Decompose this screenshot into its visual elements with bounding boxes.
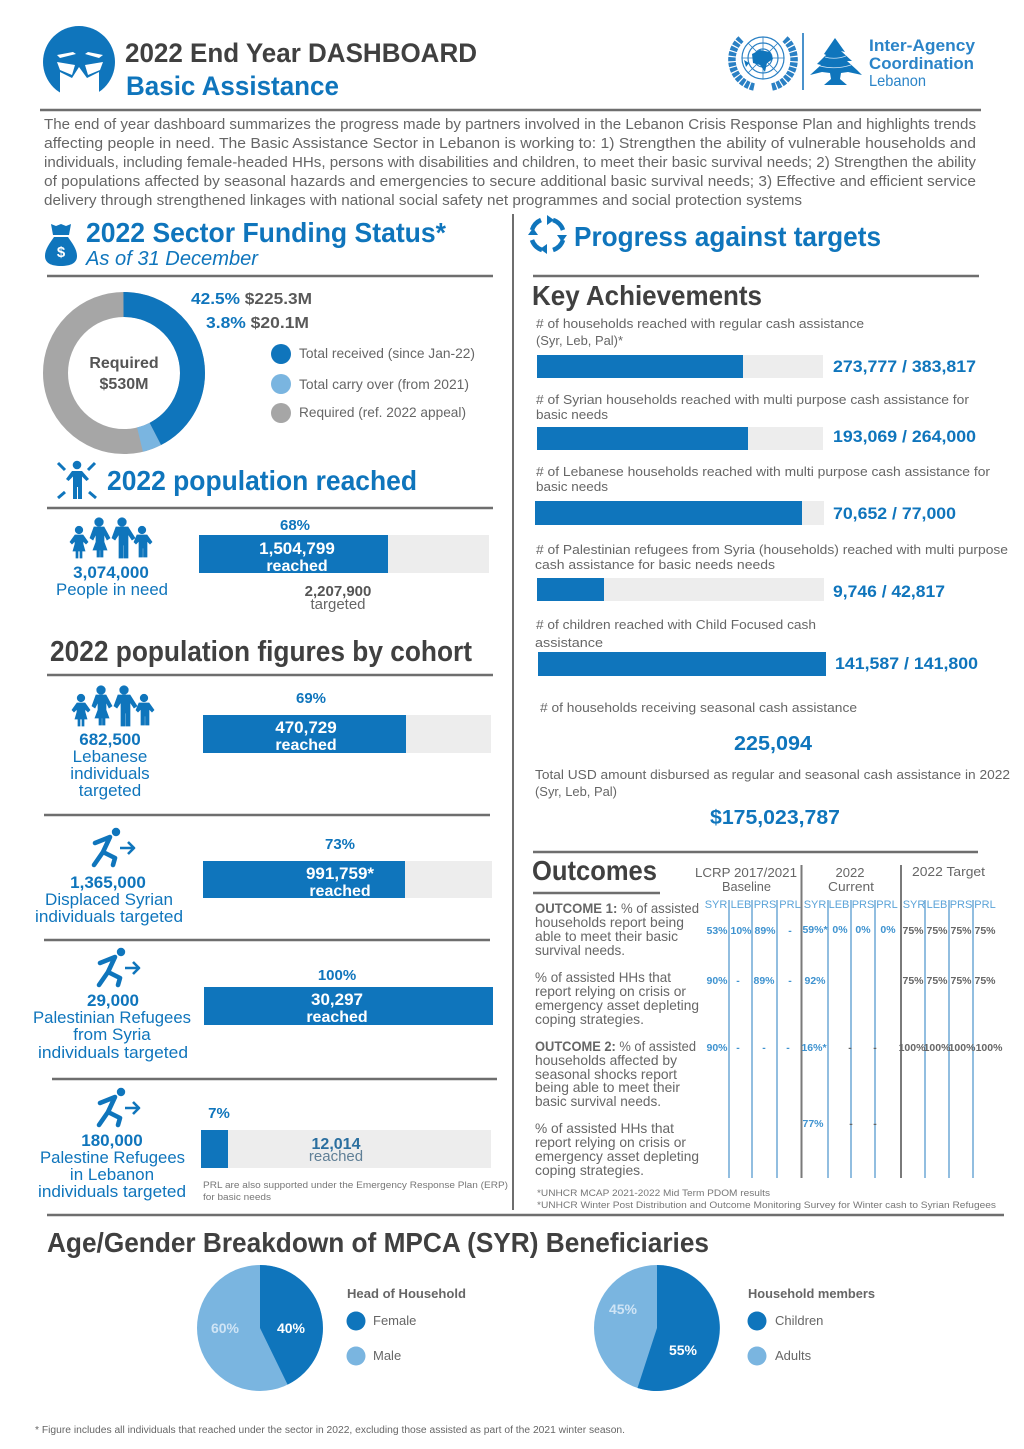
heading: progress: Progress against targets xyxy=(574,221,881,252)
table headers: 2022 Target xyxy=(912,864,985,879)
bar: Syrian xyxy=(203,836,492,900)
heading: key achievements: Key Achievements xyxy=(532,280,762,311)
footnote: * Figure includes all individuals that reached under the sector in 2022, excluding those assisted as part of the 2021 winter season. xyxy=(35,1425,625,1436)
icon: money bag xyxy=(45,224,77,266)
population column labels: PRS xyxy=(852,899,874,911)
bar: population reached: targeted xyxy=(310,596,366,613)
outcome descriptions: able to meet their basic xyxy=(535,928,678,944)
achievement: Syrian MPC: basic needs xyxy=(536,407,609,422)
logo: divider xyxy=(802,33,804,90)
achievement: PRS MPC xyxy=(535,542,1008,601)
intro paragraph: The end of year dashboard summarizes the progress made by partners involved in the Lebanon Crisis Response Plan and highlights trends xyxy=(44,116,976,133)
achievement: child cash: assistance xyxy=(535,635,603,650)
legend: household members: Household members xyxy=(748,1286,875,1301)
outcome descriptions: emergency asset depleting xyxy=(535,997,699,1013)
pie chart: head of household: 60% xyxy=(211,1320,240,1336)
outcome descriptions: % of assisted HHs that xyxy=(535,969,671,985)
achievement: seasonal xyxy=(540,700,857,755)
outcome 2 values: - xyxy=(736,1042,740,1054)
bar: PRS: 100% xyxy=(318,967,356,984)
outcome 2b values: - xyxy=(873,1118,877,1130)
heading: age/gender breakdown: Age/Gender Breakdown of MPCA (SYR) Beneficiaries xyxy=(47,1227,709,1258)
title xyxy=(125,38,477,101)
title: Basic Assistance xyxy=(126,71,339,101)
Lebanese label: Lebanese xyxy=(73,747,147,766)
achievement: Syrian MPC: 193,069 / 264,000 xyxy=(833,427,976,446)
achievement: Lebanese MPC xyxy=(535,464,991,525)
PRL note: for basic needs xyxy=(203,1192,272,1202)
PRL label: Palestine Refugees xyxy=(40,1148,185,1167)
outcome descriptions: report relying on crisis or xyxy=(535,1134,686,1150)
outcome 1 values: 0% xyxy=(855,924,871,936)
outcome descriptions: OUTCOME 2: % of assisted xyxy=(535,1038,696,1054)
bar: PRL: 12,014 xyxy=(312,1136,361,1153)
outcome 1b values: 89% xyxy=(753,975,775,987)
bar: population reached: 2,207,900 xyxy=(305,583,371,600)
pie chart: household members: 45% xyxy=(609,1301,638,1317)
outcome descriptions: coping strategies. xyxy=(535,1162,644,1178)
bar: PRL: 7% xyxy=(208,1105,230,1122)
PRS label: Palestinian Refugees xyxy=(33,1008,191,1027)
funding legend: Required (ref. 2022 appeal) xyxy=(299,404,466,420)
population column labels: PRS xyxy=(754,899,776,911)
achievement: regular cash: # of households reached with regular cash assistance xyxy=(536,316,864,331)
outcome 1 values: 89% xyxy=(754,925,776,937)
logo: Inter-Agency Coordination text: Inter-Agency xyxy=(869,36,976,55)
population column labels: PRS xyxy=(950,899,972,911)
outcome footnotes: *UNHCR MCAP 2021-2022 Mid Term PDOM results xyxy=(537,1188,771,1198)
achievement: seasonal: # of households receiving seasonal cash assistance xyxy=(540,700,857,715)
Syrian label: 1,365,000 xyxy=(70,873,146,892)
bar: PRS: 30,297 xyxy=(311,990,363,1009)
achievement: child cash: 141,587 / 141,800 xyxy=(835,654,978,673)
Syrian label: individuals targeted xyxy=(35,907,183,926)
title: 2022 End Year DASHBOARD xyxy=(125,38,477,68)
intro paragraph xyxy=(44,116,976,209)
outcome descriptions: being able to meet their xyxy=(535,1079,680,1095)
icon: family xyxy=(70,518,152,558)
achievement: Lebanese MPC: basic needs xyxy=(536,479,609,494)
cohort: Lebanese xyxy=(70,686,491,800)
outcome footnotes xyxy=(537,1188,997,1210)
PRL label: 180,000 xyxy=(81,1131,143,1150)
bar: population reached xyxy=(199,517,489,613)
achievement: USD disbursed: Total USD amount disbursed as regular and seasonal cash assistance in 2022 xyxy=(535,767,1010,782)
heading: population reached: 2022 population reached xyxy=(107,465,417,496)
bar: Lebanese: reached xyxy=(275,737,337,754)
bar: PRL xyxy=(201,1105,491,1168)
donut chart: Required xyxy=(89,355,159,372)
intro paragraph: affecting people in need. The Basic Assistance Sector in Lebanon is working to: 1) Strengthen the ability of vulnerable households and xyxy=(44,135,976,152)
intro paragraph: individuals, including female-headed HHs, persons with disabilities and children, to meet their basic survival needs; 2) Strengthen the ability xyxy=(44,154,976,171)
achievement: regular cash xyxy=(536,316,976,378)
outcome 2 values: 90% xyxy=(706,1042,728,1054)
achievement: USD disbursed: (Syr, Leb, Pal) xyxy=(535,784,617,799)
outcome 1 values: 75% xyxy=(950,925,972,937)
outcome descriptions: OUTCOME 1: % of assisted xyxy=(535,900,699,916)
outcome 1b values: 75% xyxy=(950,975,972,987)
donut chart xyxy=(56,304,192,442)
outcomes table lines xyxy=(729,865,973,1178)
population column labels: PRL xyxy=(779,899,801,911)
outcome 1 values: 0% xyxy=(880,924,896,936)
bar: population reached: reached xyxy=(266,558,328,575)
population column labels xyxy=(705,899,996,911)
logo: Inter-Agency Coordination text: Lebanon xyxy=(869,73,926,90)
achievement: child cash: # of children reached with Child Focused cash xyxy=(536,617,816,632)
cohort: Palestinian Refugees from Syria xyxy=(33,948,493,1062)
outcome 1b values: - xyxy=(788,975,792,987)
outcome 1b values xyxy=(706,975,996,987)
PRL label xyxy=(38,1131,186,1201)
population column labels: SYR xyxy=(705,899,727,911)
icon: money bag: $ xyxy=(57,244,66,261)
funding legend: Total carry over (from 2021) xyxy=(299,376,469,392)
achievement: PRS MPC: 9,746 / 42,817 xyxy=(833,582,945,601)
outcome descriptions: emergency asset depleting xyxy=(535,1148,699,1164)
outcome descriptions: % of assisted HHs that xyxy=(535,1120,674,1136)
pie chart: head of household xyxy=(197,1265,323,1391)
outcome 1 values: 75% xyxy=(974,925,996,937)
bar: Syrian: 73% xyxy=(325,836,355,853)
population column labels: LEB xyxy=(829,899,849,911)
cohort: Palestine Refugees in Lebanon xyxy=(38,1088,508,1202)
outcome 2 values: 100% xyxy=(976,1042,1003,1054)
logo: UN emblem xyxy=(732,37,794,87)
outcome 1b values: 92% xyxy=(804,975,826,987)
population column labels: LEB xyxy=(927,899,947,911)
bar: PRS: reached xyxy=(306,1009,368,1026)
panel: key achievements xyxy=(532,280,1010,829)
outcome 2 values: - xyxy=(873,1042,877,1054)
funding legend xyxy=(271,344,475,423)
bar: population reached: 1,504,799 xyxy=(259,539,335,558)
Lebanese label: 682,500 xyxy=(79,730,141,749)
outcome descriptions: basic survival needs. xyxy=(535,1093,661,1109)
icon: runner xyxy=(99,1088,139,1125)
achievement: USD disbursed xyxy=(535,767,1010,829)
achievement: child cash xyxy=(535,617,978,676)
outcome descriptions: seasonal shocks report xyxy=(535,1066,677,1082)
table headers xyxy=(695,864,985,894)
legend: household members xyxy=(748,1286,875,1366)
achievement: PRS MPC: # of Palestinian refugees from Syria (households) reached with multi purpose xyxy=(536,542,1008,557)
PRS label: from Syria xyxy=(73,1025,151,1044)
cohort: Displaced Syrian xyxy=(35,828,492,926)
outcome 2 values: 100% xyxy=(899,1042,926,1054)
pie chart: household members: 55% xyxy=(669,1342,698,1358)
outcome descriptions: coping strategies. xyxy=(535,1011,644,1027)
bar: Syrian: reached xyxy=(309,883,371,900)
PRS label xyxy=(33,991,191,1062)
table headers: Baseline xyxy=(722,879,771,894)
achievement: PRS MPC: cash assistance for basic needs needs xyxy=(535,557,776,572)
funding values: 42.5% $225.3M xyxy=(191,291,312,308)
achievement: Lebanese MPC: 70,652 / 77,000 xyxy=(833,504,956,523)
Lebanese label: targeted xyxy=(79,781,141,800)
outcome 1b values: - xyxy=(736,975,740,987)
people in need: People in need xyxy=(56,580,168,599)
outcome descriptions: survival needs. xyxy=(535,942,625,958)
logo: Inter-Agency Coordination text: Coordination xyxy=(869,54,974,73)
Syrian label: Displaced Syrian xyxy=(45,890,173,909)
outcome footnotes: *UNHCR Winter Post Distribution and Outcome Monitoring Survey for Winter cash to Syrian Refugees xyxy=(537,1200,997,1210)
icon: person with rays xyxy=(58,461,96,499)
bar: Lebanese: 69% xyxy=(296,690,326,707)
heading: funding: As of 31 December xyxy=(85,248,259,270)
legend: head of household: Female xyxy=(373,1313,416,1328)
population column labels: PRL xyxy=(974,899,996,911)
outcome 1 values: 53% xyxy=(706,925,728,937)
achievement: regular cash: (Syr, Leb, Pal)* xyxy=(536,333,623,348)
icon: runner xyxy=(99,948,139,985)
funding values: 3.8% $20.1M xyxy=(206,315,309,332)
PRL label: individuals targeted xyxy=(38,1182,186,1201)
logo: cedar tree xyxy=(810,38,862,85)
logo: Inter-Agency Coordination text xyxy=(869,36,976,90)
outcome descriptions: households report being xyxy=(535,914,684,930)
table headers: LCRP 2017/2021 xyxy=(695,865,797,880)
outcome 1 values: 59%* xyxy=(802,924,828,936)
population column labels: PRL xyxy=(876,899,898,911)
Lebanese label xyxy=(70,730,150,800)
outcome descriptions: households affected by xyxy=(535,1052,677,1068)
bar: PRL: reached xyxy=(309,1148,363,1165)
outcome 2b values: 77% xyxy=(802,1118,824,1130)
heading: funding xyxy=(85,217,446,270)
panel: progress against targets header xyxy=(528,215,881,254)
outcome 1b values: 75% xyxy=(926,975,948,987)
pie chart: household members xyxy=(594,1265,720,1391)
bar: Lebanese xyxy=(203,690,491,754)
outcome descriptions xyxy=(535,900,699,1178)
panel: outcomes xyxy=(532,855,1003,1210)
heading: population by cohort: 2022 population figures by cohort xyxy=(50,636,472,668)
outcome 1 values: 10% xyxy=(730,925,752,937)
intro paragraph: of populations affected by seasonal hazards and emergencies to secure additional basic survival needs; 3) Effective and efficient service xyxy=(44,173,976,190)
legend: head of household xyxy=(346,1286,466,1366)
PRS label: individuals targeted xyxy=(38,1043,188,1062)
outcome 2 values: - xyxy=(786,1042,790,1054)
outcome descriptions: report relying on crisis or xyxy=(535,983,686,999)
table headers: 2022 xyxy=(836,865,864,880)
PRL note: PRL are also supported under the Emergency Response Plan (ERP) xyxy=(203,1180,508,1190)
outcome 1 values xyxy=(706,924,996,937)
icon: runner xyxy=(94,828,134,865)
bar: population reached: 68% xyxy=(280,517,310,534)
population column labels: SYR xyxy=(903,899,925,911)
Lebanese label: individuals xyxy=(70,764,150,783)
achievement: Lebanese MPC: # of Lebanese households reached with multi purpose cash assistance for xyxy=(536,464,991,479)
header icon: basic assistance box xyxy=(43,26,115,100)
bar: Syrian: 991,759* xyxy=(306,864,374,883)
achievement: seasonal: 225,094 xyxy=(734,733,813,755)
legend: head of household: Head of Household xyxy=(347,1286,466,1301)
outcome 2 values: 100% xyxy=(924,1042,951,1054)
Syrian label xyxy=(35,873,183,926)
outcome 1 values: 75% xyxy=(926,925,948,937)
outcome 2 values: - xyxy=(762,1042,766,1054)
people in need xyxy=(56,563,168,599)
PRS label: 29,000 xyxy=(87,991,139,1010)
population column labels: SYR xyxy=(804,899,826,911)
legend: household members: Adults xyxy=(775,1348,812,1363)
PRL label: in Lebanon xyxy=(70,1165,154,1184)
legend: household members: Children xyxy=(775,1313,823,1328)
outcome 1 values: 75% xyxy=(902,925,924,937)
outcome 1 values: 0% xyxy=(832,924,848,936)
heading: outcomes: Outcomes xyxy=(532,855,657,886)
achievement: USD disbursed: $175,023,787 xyxy=(710,807,840,829)
pie chart: head of household: 40% xyxy=(277,1320,306,1336)
intro paragraph: delivery through strengthened linkages with national social safety net programmes and social protection systems xyxy=(44,192,802,209)
outcome 2 values xyxy=(706,1042,1003,1054)
achievement: regular cash: 273,777 / 383,817 xyxy=(833,357,976,376)
bar: PRS xyxy=(204,967,493,1026)
PRL note xyxy=(203,1180,508,1202)
icon: family xyxy=(72,686,154,726)
outcome 2b values xyxy=(802,1118,877,1130)
achievement: Syrian MPC xyxy=(536,392,976,450)
outcome 2 values: 16%* xyxy=(801,1042,827,1054)
outcome 2b values: - xyxy=(849,1118,853,1130)
funding legend: Total received (since Jan-22) xyxy=(299,345,475,361)
population column labels: LEB xyxy=(731,899,751,911)
panel: funding status xyxy=(45,217,493,442)
bar: Lebanese: 470,729 xyxy=(275,718,337,737)
outcome 2 values: 100% xyxy=(949,1042,976,1054)
outcome 1b values: 75% xyxy=(902,975,924,987)
legend: head of household: Male xyxy=(373,1348,401,1363)
table headers: Current xyxy=(828,879,874,894)
achievement: Syrian MPC: # of Syrian households reached with multi purpose cash assistance for xyxy=(536,392,970,407)
funding values xyxy=(191,291,312,332)
outcome 1b values: 90% xyxy=(706,975,728,987)
outcome 1 values: - xyxy=(788,925,792,937)
heading: funding: 2022 Sector Funding Status* xyxy=(86,217,446,248)
icon: circular arrows xyxy=(528,215,567,254)
people in need: 3,074,000 xyxy=(73,563,149,582)
outcome 1b values: 75% xyxy=(974,975,996,987)
outcome 2 values: - xyxy=(848,1042,852,1054)
donut chart: $530M xyxy=(100,376,148,393)
panel: population reached xyxy=(47,461,493,613)
